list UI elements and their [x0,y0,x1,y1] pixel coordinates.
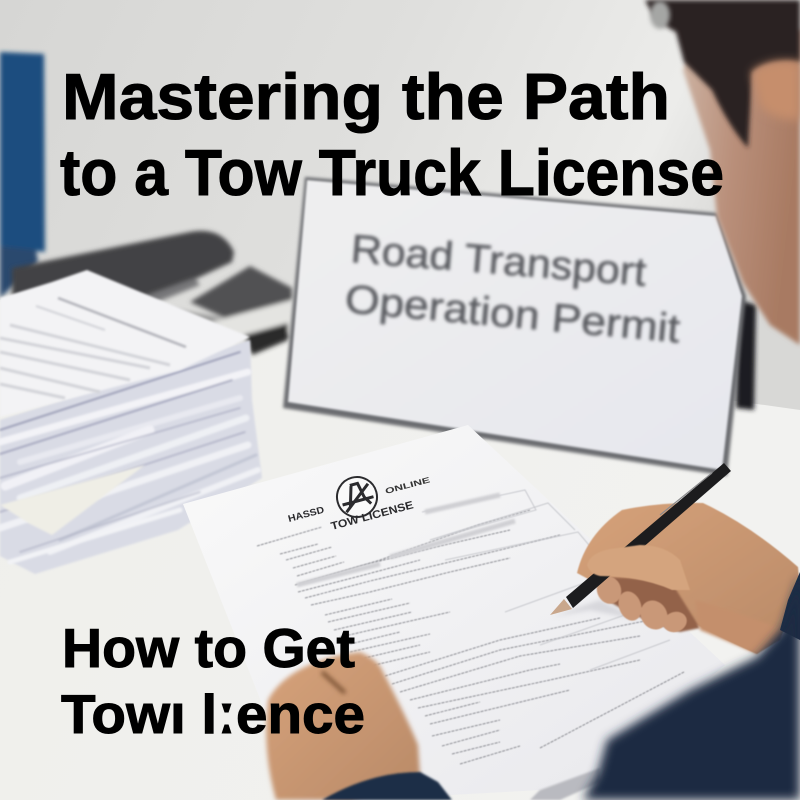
subtitle line two: Towı lːence [61,683,365,745]
form table boxes [422,490,670,670]
person's dark jacket shoulder [583,575,800,800]
stack cream sheet sticking out [0,465,145,535]
right hand writing [550,463,800,654]
desk surface [0,300,800,800]
form header right word: ONLINE [384,475,432,496]
blurred black office device [12,231,292,355]
title line one: Mastering the Path [62,60,670,133]
form title: TOW LICENSE [330,499,415,533]
subtitle line one: How to Get [62,617,355,679]
background wall [0,0,800,420]
blurred glasses arm [650,1,670,29]
stack of papers [0,270,262,574]
stack top sheet lines [0,298,186,398]
title line two: to a Tow Truck License [60,136,724,209]
sign frame [283,177,746,476]
left hand holding document [266,652,452,800]
stack top sheet [0,270,250,417]
application form document [183,425,725,800]
subtitle [61,617,365,745]
pen shadow on document [552,600,640,620]
right hand shadow under thumb [600,577,700,632]
right sleeve cuff [780,572,800,640]
right hand fingers [593,573,690,636]
title [60,60,724,209]
left hand finger shadow [322,672,345,693]
sign face [288,180,742,470]
form grey highlight bands [297,495,515,585]
stack layered sheets [0,352,258,562]
right hand palm and index finger [577,503,800,654]
blue office chair [0,52,45,298]
form emblem [333,473,381,521]
right thumb [587,545,690,590]
hair [645,0,800,148]
stack body [0,340,262,574]
sign board: Road Transport Operation Permit [283,177,756,476]
paper lower edge [530,768,600,800]
left sleeve [322,772,452,800]
ear [752,61,800,120]
form header left word: HASSD [287,505,326,525]
face [683,30,800,345]
form text lines [257,510,700,764]
pen [550,463,731,615]
sign stand shadow [736,300,756,410]
palm heel [695,600,780,654]
sign text line two: Operation Permit [343,277,682,351]
sign text line one: Road Transport [349,227,648,295]
person's head [645,0,800,345]
paper sheet [183,425,725,800]
